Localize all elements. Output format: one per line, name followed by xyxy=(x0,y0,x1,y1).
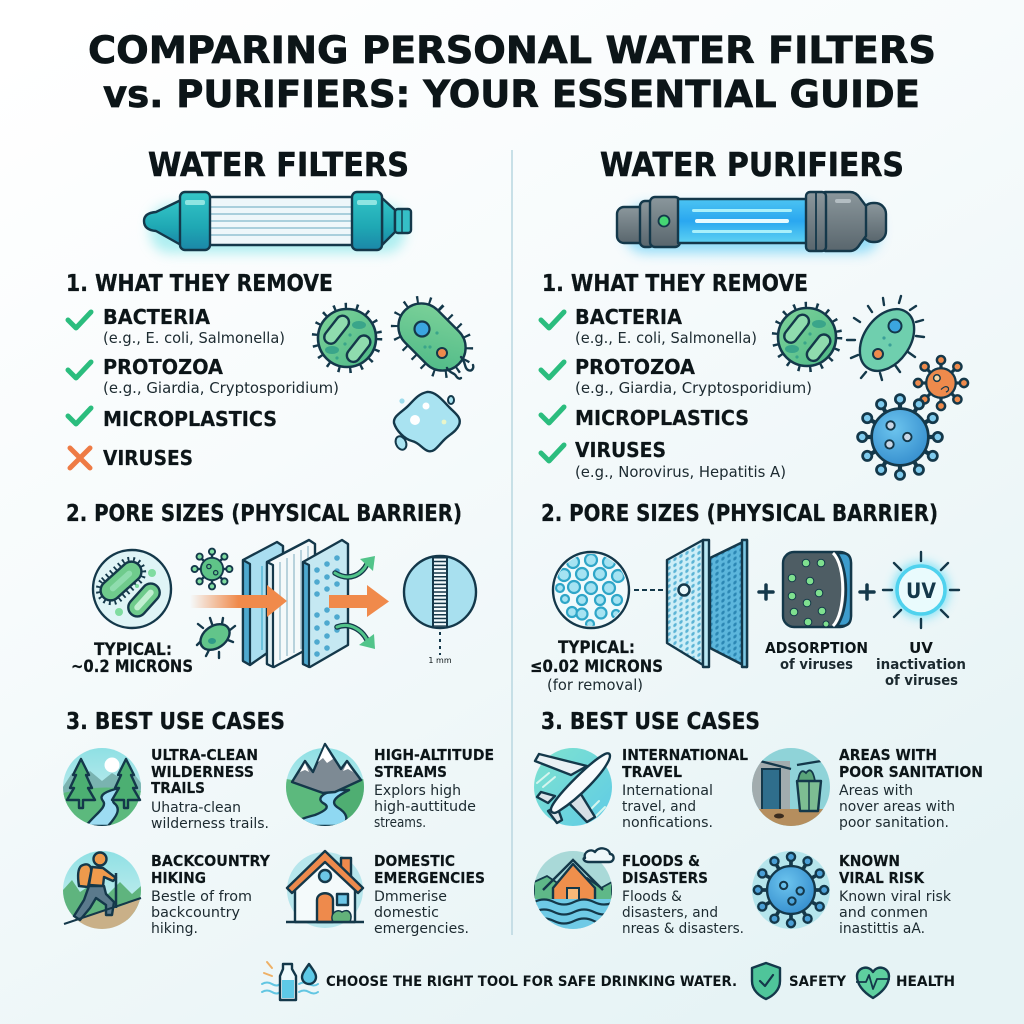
arrow: rejected up xyxy=(335,556,375,577)
arrow: rejected down xyxy=(337,625,375,649)
label: typical pore xyxy=(71,640,193,677)
text: health: HEALTH xyxy=(896,974,955,990)
icon: check protozoa xyxy=(68,362,91,378)
label: uv inactivation: inactivation xyxy=(876,657,966,673)
icon: house xyxy=(286,851,364,928)
icon: check viruses xyxy=(541,445,564,461)
text: high altitude streams: HIGH-ALTITUDE xyxy=(374,746,494,764)
label: adsorption: ADSORPTION xyxy=(765,639,868,657)
text: backcountry hiking: BACKCOUNTRY xyxy=(151,852,271,870)
text: poor sanitation: Areas with xyxy=(839,783,913,799)
diagram: filter pore barrier xyxy=(71,540,476,677)
icon: check protozoa xyxy=(541,362,564,378)
text: domestic emergencies: Dmmerise xyxy=(374,889,447,905)
label: protozoa: (e.g., Giardia, Cryptosporidium) xyxy=(575,379,812,397)
icon: microplastic fragment xyxy=(394,392,460,451)
text: floods and disasters: DISASTERS xyxy=(622,869,708,887)
section heading: what they remove: 1. WHAT THEY REMOVE xyxy=(542,271,808,297)
text: backcountry hiking: backcountry xyxy=(151,905,240,921)
text: backcountry hiking: HIKING xyxy=(151,869,206,887)
section heading: pore sizes: 2. PORE SIZES (PHYSICAL BARRIER) xyxy=(66,501,462,527)
label: viruses: VIRUSES xyxy=(575,438,666,462)
text: poor sanitation: AREAS WITH xyxy=(839,746,937,764)
icon: check microplastics xyxy=(68,408,91,424)
label: microplastics: MICROPLASTICS xyxy=(103,407,277,431)
text: international travel: travel, and xyxy=(622,799,696,815)
text: domestic emergencies: emergencies. xyxy=(374,921,469,937)
operator plus xyxy=(860,585,874,599)
panel: water filters xyxy=(63,146,494,937)
text: wilderness trails xyxy=(151,746,269,832)
text: known viral risk: VIRAL RISK xyxy=(839,869,925,887)
icon: check microplastics xyxy=(541,407,564,423)
text: international travel: TRAVEL xyxy=(622,763,682,781)
label: viruses: VIRUSES xyxy=(103,446,193,470)
icon: cross viruses xyxy=(70,448,90,468)
text: floods and disasters: FLOODS & xyxy=(622,852,700,870)
label: bacteria: (e.g., E. coli, Salmonella) xyxy=(575,329,757,347)
section heading: best use cases: 3. BEST USE CASES xyxy=(541,709,760,735)
label: uv inactivation: UV xyxy=(909,639,933,657)
text: wilderness trails: ULTRA-CLEAN xyxy=(151,746,258,764)
purifier membranes xyxy=(667,540,747,667)
label: typical pore: ~0.2 MICRONS xyxy=(71,657,193,677)
icon: heart xyxy=(856,968,890,998)
label: uv inactivation xyxy=(876,639,966,689)
use case: backcountry hiking xyxy=(63,851,271,937)
icon: hiker xyxy=(63,851,141,929)
use case: wilderness trails xyxy=(63,746,269,832)
text: high altitude streams xyxy=(374,746,494,831)
text: high altitude streams: high-auttitude xyxy=(374,799,476,815)
icon: uv lamp: UV xyxy=(906,579,937,603)
label: typical pore: ≤0.02 MICRONS xyxy=(530,657,663,677)
text: domestic emergencies: EMERGENCIES xyxy=(374,869,485,887)
text: floods and disasters xyxy=(622,852,744,937)
label: viruses xyxy=(575,438,786,481)
removal list xyxy=(541,305,812,481)
text: backcountry hiking: hiking. xyxy=(151,921,198,937)
label: bacteria: BACTERIA xyxy=(575,305,682,329)
text: safety: SAFETY xyxy=(789,974,846,990)
label: 1 mm: 1 mm xyxy=(428,656,452,665)
arrow: incoming flow xyxy=(190,585,287,617)
icon: round bacterium xyxy=(775,305,839,369)
text: poor sanitation xyxy=(839,746,983,831)
title xyxy=(88,29,936,116)
icon: virus xyxy=(752,851,830,929)
operator plus xyxy=(759,585,773,599)
text: known viral risk: and conmen xyxy=(839,905,928,921)
icon: filter cartridge xyxy=(144,192,411,253)
icon: mountain stream xyxy=(286,744,364,826)
text: high altitude streams: Explors high xyxy=(374,783,461,799)
text: known viral risk: KNOWN xyxy=(839,852,900,870)
text: domestic emergencies: DOMESTIC xyxy=(374,852,455,870)
icon: round bacterium xyxy=(315,306,379,370)
icon: flooded house xyxy=(534,848,614,931)
text: poor sanitation: nover areas with xyxy=(839,799,955,815)
arrow: center through flow xyxy=(329,585,389,617)
label: typical pore: (for removal) xyxy=(547,676,643,694)
icon: uv lamp xyxy=(883,552,959,628)
section heading: best use cases: 3. BEST USE CASES xyxy=(66,709,285,735)
text: wilderness trails: Uhatra-clean xyxy=(151,800,241,816)
text: international travel: International xyxy=(622,783,713,799)
label: protozoa xyxy=(575,355,812,397)
text: known viral risk: inastittis aA. xyxy=(839,921,925,937)
icon: check bacteria xyxy=(541,312,564,328)
title: vs. PURIFIERS: YOUR ESSENTIAL GUIDE xyxy=(103,73,920,116)
title: COMPARING PERSONAL WATER FILTERS xyxy=(88,29,936,72)
label: typical pore: TYPICAL: xyxy=(94,640,172,660)
text: international travel xyxy=(622,746,748,831)
text: floods and disasters: nreas & disasters. xyxy=(622,921,744,937)
icon: bacteria magnified xyxy=(93,550,171,628)
text: domestic emergencies: domestic xyxy=(374,905,439,921)
text: wilderness trails: wilderness trails. xyxy=(151,816,269,832)
text: floods and disasters: disasters, and xyxy=(622,905,718,921)
icon: shield xyxy=(752,963,780,999)
section heading: what they remove: 1. WHAT THEY REMOVE xyxy=(66,271,333,297)
label: adsorption xyxy=(765,639,868,673)
connector xyxy=(634,589,678,591)
icon: pore cross-section xyxy=(404,556,476,655)
label: bacteria: BACTERIA xyxy=(103,305,210,329)
use case: international travel xyxy=(534,746,748,831)
use case: high altitude streams xyxy=(286,744,494,831)
text: wilderness trails: WILDERNESS xyxy=(151,763,254,781)
filter layers xyxy=(243,540,348,667)
text: backcountry hiking xyxy=(151,852,271,937)
text: high altitude streams: STREAMS xyxy=(374,763,447,781)
label: protozoa: (e.g., Giardia, Cryptosporidium) xyxy=(103,379,339,397)
icon: membrane close-up xyxy=(553,552,629,628)
use case: known viral risk xyxy=(752,851,952,937)
label: typical pore xyxy=(530,638,663,694)
text: backcountry hiking: Bestle of from xyxy=(151,889,252,905)
text: floods and disasters: Floods & xyxy=(622,889,682,905)
icon: adsorption carbon xyxy=(783,552,851,627)
removal list xyxy=(68,305,339,470)
icon: check bacteria xyxy=(68,312,91,328)
text: high altitude streams: streams. xyxy=(374,815,426,831)
text: known viral risk: Known viral risk xyxy=(839,889,952,905)
label: bacteria xyxy=(103,305,285,347)
icon: uv purifier xyxy=(617,192,886,253)
text: international travel: nonfications. xyxy=(622,815,713,831)
label: protozoa: PROTOZOA xyxy=(103,355,223,379)
label: protozoa xyxy=(103,355,339,397)
text: domestic emergencies xyxy=(374,852,485,937)
icon: water bottle xyxy=(262,962,318,1000)
icon: airplane xyxy=(534,748,612,826)
heading: water purifiers: WATER PURIFIERS xyxy=(600,146,904,184)
use case: floods and disasters xyxy=(534,848,744,937)
label: viruses: (e.g., Norovirus, Hepatitis A) xyxy=(575,463,786,481)
icon: rod bacterium xyxy=(383,288,481,386)
label: uv inactivation: of viruses xyxy=(885,673,958,689)
icon: small virus xyxy=(192,549,232,589)
label: typical pore: TYPICAL: xyxy=(558,638,635,658)
icon: orange virus xyxy=(914,356,968,410)
use case: domestic emergencies xyxy=(286,851,485,937)
diagram: purifier barrier xyxy=(530,540,966,694)
icon: sanitation scene xyxy=(752,748,830,829)
label: microplastics: MICROPLASTICS xyxy=(575,406,749,430)
text: wilderness trails: TRAILS xyxy=(151,779,205,797)
label: adsorption: of viruses xyxy=(780,657,853,673)
use case: poor sanitation xyxy=(752,746,983,831)
icon: forest trail xyxy=(63,748,141,826)
icon: small bacterium xyxy=(196,618,235,658)
text: tagline: CHOOSE THE RIGHT TOOL FOR SAFE DRINKING WATER. xyxy=(326,974,737,990)
icon: blue virus xyxy=(858,395,942,479)
icon: protozoan xyxy=(847,296,925,381)
text: poor sanitation: POOR SANITATION xyxy=(839,763,983,781)
label: bacteria xyxy=(575,305,757,347)
label: bacteria: (e.g., E. coli, Salmonella) xyxy=(103,329,285,347)
section heading: pore sizes: 2. PORE SIZES (PHYSICAL BARRIER) xyxy=(541,501,938,527)
text: poor sanitation: poor sanitation. xyxy=(839,815,949,831)
heading: water filters: WATER FILTERS xyxy=(148,146,409,184)
footer xyxy=(262,962,955,1000)
panel: water purifiers xyxy=(530,146,983,937)
label: protozoa: PROTOZOA xyxy=(575,355,695,379)
text: international travel: INTERNATIONAL xyxy=(622,746,748,764)
text: known viral risk xyxy=(839,852,952,937)
